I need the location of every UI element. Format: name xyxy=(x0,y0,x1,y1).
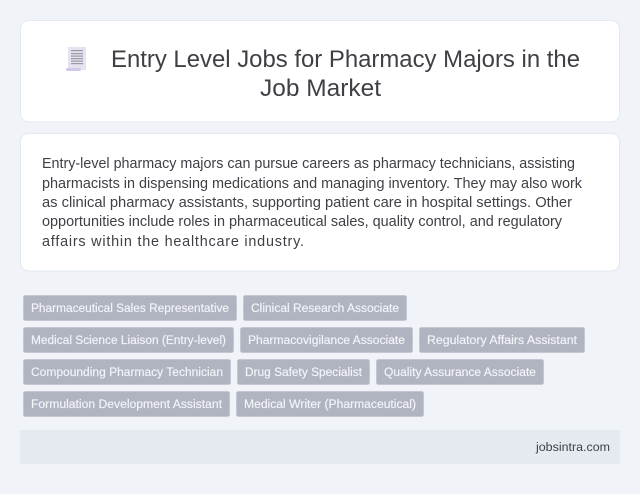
text block: description: affairs within the healthcare industry. xyxy=(42,234,304,250)
tag: Drug Safety Specialist xyxy=(238,360,370,384)
tag: Quality Assurance Associate: Quality Assurance Associate xyxy=(384,365,536,379)
title: Entry Level Jobs for Pharmacy Majors in the xyxy=(111,46,580,73)
text block: description: Entry-level pharmacy majors can pursue careers as pharmacy technicians, assisting xyxy=(42,156,575,172)
text block: description: as clinical pharmacy assistants, supporting patient care in hospital settings. Other xyxy=(42,195,572,211)
panel: job tags xyxy=(24,296,584,416)
text block: description xyxy=(42,156,583,250)
text block: description: pharmacists in dispensing medications and managing inventory. They may also work xyxy=(42,176,583,192)
tag: Regulatory Affairs Assistant: Regulatory Affairs Assistant xyxy=(427,333,578,347)
footer xyxy=(20,430,620,464)
tag: Drug Safety Specialist: Drug Safety Specialist xyxy=(245,365,363,379)
panel: title card xyxy=(20,20,620,122)
tag: Pharmaceutical Sales Representative: Pharmaceutical Sales Representative xyxy=(31,301,229,315)
tag: Quality Assurance Associate xyxy=(376,360,544,384)
tag: Pharmacovigilance Associate xyxy=(240,328,412,352)
tag: Formulation Development Assistant: Formulation Development Assistant xyxy=(31,397,223,411)
icon: document scroll xyxy=(66,47,86,71)
tag: Medical Writer (Pharmaceutical) xyxy=(236,392,424,416)
tag: Compounding Pharmacy Technician xyxy=(24,360,230,384)
tag: Clinical Research Associate: Clinical Research Associate xyxy=(251,301,399,315)
tag: Pharmacovigilance Associate: Pharmacovigilance Associate xyxy=(248,333,405,347)
tag: Clinical Research Associate xyxy=(244,296,406,320)
tag: Medical Science Liaison xyxy=(24,328,234,352)
footer text: site name: jobsintra.com xyxy=(535,440,610,454)
panel: description card xyxy=(20,134,620,271)
title: Job Market xyxy=(260,75,381,102)
text block: description: opportunities include roles in pharmaceutical sales, quality control, and regulatory xyxy=(42,214,563,230)
title xyxy=(111,46,580,102)
tag: Pharmaceutical Sales Representative xyxy=(24,296,236,320)
tag: Regulatory Affairs Assistant xyxy=(420,328,584,352)
tag: Compounding Pharmacy Technician: Compounding Pharmacy Technician xyxy=(31,365,223,379)
tag: Formulation Development Assistant xyxy=(24,392,230,416)
tag: Medical Science Liaison: Medical Science Liaison (Entry-level) xyxy=(31,333,226,347)
tag: Medical Writer (Pharmaceutical): Medical Writer (Pharmaceutical) xyxy=(244,397,416,411)
